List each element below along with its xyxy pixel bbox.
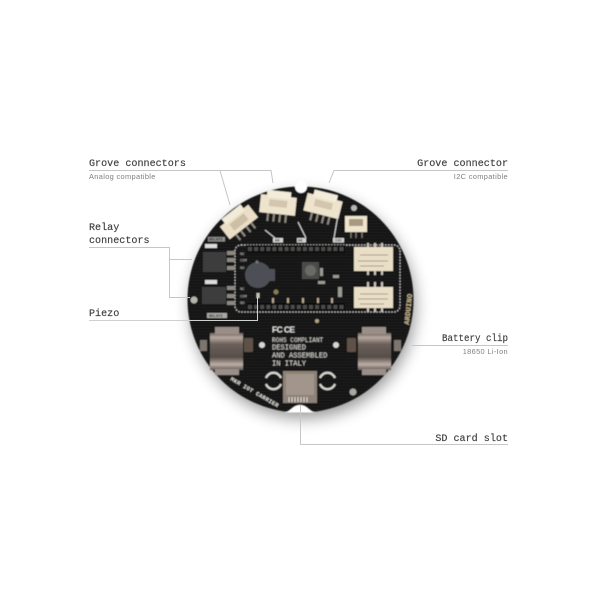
callout: Piezo: Piezo [89, 308, 119, 320]
connector labels: RELAY1 [209, 238, 223, 242]
board body [188, 186, 414, 412]
mounting hole top right [351, 205, 357, 211]
header bottom [247, 298, 345, 311]
bottom notch [285, 405, 315, 412]
relay pin labels: NO [240, 302, 245, 306]
callout: Grove connector I2C [329, 159, 508, 183]
callout: SD card slot [300, 405, 508, 445]
board silkscreen text: ROHS COMPLIANT [272, 337, 324, 344]
connector labels: A0 [275, 240, 280, 244]
mounting hole left [190, 296, 198, 304]
icon: small connector [345, 216, 367, 238]
relay pin labels: NO [240, 267, 245, 271]
relay pin labels: NC [240, 253, 245, 257]
connector labels [208, 215, 344, 244]
circuit board [188, 181, 415, 412]
icon: battery clip left [200, 327, 265, 375]
ARDUINO vertical mark: ARDUINO [404, 293, 415, 325]
callout: Relay connectors: connectors [89, 236, 150, 247]
mounting hole bottom right [350, 388, 356, 396]
callout: SD card slot: SD card slot [435, 433, 508, 445]
board drop shadow [191, 194, 415, 418]
icon: relay connector 2: RELAY2 [209, 315, 223, 319]
callout: Grove connector I2C: I2C compatible [454, 172, 508, 181]
relay 2 [354, 282, 393, 312]
icon: SD card slot [283, 371, 317, 403]
icon: battery clip right [333, 327, 401, 375]
connector labels: I2C [335, 240, 343, 244]
relay pin labels: COM [240, 296, 248, 300]
icon: grove connector analog 1 [217, 201, 262, 245]
icon: grove connector i2c [301, 188, 344, 227]
board silkscreen text: DESIGNED [272, 344, 306, 352]
relay pin labels: NC [240, 288, 245, 292]
top notch [295, 181, 307, 193]
relay pin labels [240, 253, 248, 306]
connector labels: A6 [298, 240, 303, 244]
icon: piezo buzzer [245, 260, 275, 288]
board silkscreen text: AND ASSEMBLED [272, 352, 327, 360]
board silkscreen text: IN ITALY [272, 360, 307, 368]
small components [256, 268, 342, 323]
callout: Grove connectors analog: Analog compatible [89, 172, 156, 181]
callout: Piezo [89, 297, 258, 320]
callout: Battery clip [412, 333, 508, 356]
certification marks: FC CE [272, 324, 295, 334]
callout: Relay connectors: Relay [89, 222, 119, 234]
board silkscreen text [272, 337, 327, 368]
icon: grove connector analog 2 [258, 189, 297, 224]
dotted outline of MKR slot [235, 245, 400, 312]
icon: relay connector 1 [203, 244, 235, 272]
callout: Relay connectors [89, 222, 192, 298]
icon: relay connector 2 [202, 280, 235, 319]
MKR IOT CARRIER curved mark: MKR IOT CARRIER [229, 376, 280, 409]
icon: touch ring right [320, 373, 335, 389]
callout: Grove connectors analog [89, 159, 273, 205]
relay 1 [354, 243, 393, 275]
callout: Grove connectors analog: Grove connectors [89, 159, 186, 170]
relay pin labels: COM [240, 260, 248, 264]
icon: reset button [302, 262, 319, 279]
callout: Battery clip: Battery clip [442, 333, 508, 345]
header top [247, 245, 345, 253]
callout: Grove connector I2C: Grove connector [417, 159, 508, 170]
callout: Battery clip: 18650 Li-Ion [463, 347, 508, 356]
icon: touch ring left [266, 373, 281, 389]
